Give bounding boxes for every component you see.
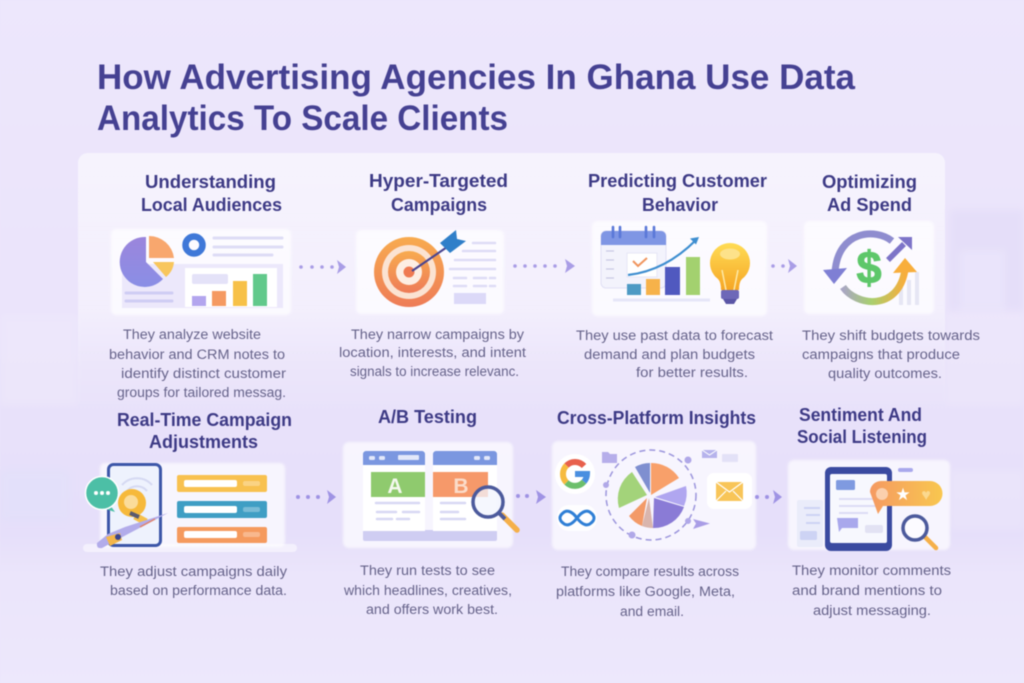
description <box>339 327 526 379</box>
heading: Sentiment And <box>799 405 922 425</box>
description: They monitor comments <box>792 563 951 578</box>
description: They run tests to see <box>360 563 495 578</box>
icon: platform logos and pie <box>552 441 756 550</box>
description <box>576 328 773 380</box>
heading: Hyper-Targeted <box>369 171 508 191</box>
panel: main backdrop <box>78 153 945 418</box>
heading <box>141 172 282 215</box>
heading: Real-Time Campaign <box>117 410 292 430</box>
icon: calendar chart and bulb <box>592 221 767 316</box>
description: They shift budgets towards <box>802 328 980 343</box>
icon: analytics dashboard <box>111 229 291 315</box>
heading: Behavior <box>642 195 718 215</box>
heading: Optimizing <box>822 172 917 192</box>
description: campaigns that produce <box>802 347 960 362</box>
title: Analytics To Scale Clients <box>97 99 508 138</box>
description <box>802 328 980 381</box>
heading: Ad Spend <box>827 195 912 215</box>
description <box>343 563 512 617</box>
description: demand and plan budgets <box>584 347 755 362</box>
description: They adjust campaigns daily <box>100 564 287 579</box>
description: and offers work best. <box>366 602 498 617</box>
panel: cross-platform insights <box>552 408 756 619</box>
panel: sentiment and social listening <box>788 405 951 618</box>
panel: predicting customer behavior <box>576 171 773 380</box>
description <box>100 564 287 598</box>
arrow <box>771 259 797 273</box>
description: groups for tailored messag. <box>117 385 286 400</box>
title <box>97 58 856 138</box>
heading: Local Audiences <box>141 195 282 215</box>
description: which headlines, creatives, <box>343 583 512 598</box>
description: They use past data to forecast <box>576 328 773 343</box>
heading: A/B Testing <box>378 407 477 427</box>
arrow <box>296 490 336 504</box>
icon: dollar with cycle arrows: $ <box>856 242 882 293</box>
heading: Understanding <box>145 172 276 192</box>
heading <box>822 172 917 215</box>
heading: Campaigns <box>391 195 487 215</box>
description: identify distinct customer <box>121 366 287 381</box>
heading: Predicting Customer <box>588 171 767 191</box>
heading <box>369 171 508 215</box>
description: behavior and CRM notes to <box>109 347 285 362</box>
panel: hyper-targeted campaigns <box>339 171 526 379</box>
panel: real-time campaign adjustments <box>83 410 297 598</box>
heading <box>117 410 292 452</box>
description: location, interests, and intent <box>339 345 526 360</box>
description: quality outcomes. <box>828 366 942 381</box>
description <box>792 563 951 618</box>
icon: a/b browser windows: B <box>453 475 469 498</box>
arrow <box>513 259 575 273</box>
description: adjust messaging. <box>813 603 931 618</box>
arrow <box>755 490 782 504</box>
description: They narrow campaigns by <box>351 327 524 342</box>
description: for better results. <box>636 365 748 380</box>
description: platforms like Google, Meta, <box>556 584 735 599</box>
description: based on performance data. <box>110 583 287 598</box>
title: How Advertising Agencies In Ghana Use Data <box>97 58 856 97</box>
description <box>556 564 739 619</box>
arrow <box>516 490 546 504</box>
heading <box>588 171 767 215</box>
panel: a/b testing <box>343 407 517 617</box>
description: and email. <box>620 604 684 619</box>
heading: Cross-Platform Insights <box>557 408 756 428</box>
icon: tablet with reaction bubble: ♥ <box>921 487 931 504</box>
icon: a/b browser windows: A <box>387 475 403 498</box>
description: and brand mentions to <box>792 583 942 598</box>
description: They compare results across <box>561 564 739 579</box>
icon: dollar with cycle arrows <box>804 221 934 314</box>
description: They analyze website <box>123 327 261 342</box>
icon: tablet with reaction bubble <box>788 460 950 551</box>
arrow <box>299 260 346 274</box>
icon: phone with campaign bars <box>83 463 297 552</box>
heading: Adjustments <box>149 432 258 452</box>
description <box>109 327 287 400</box>
panel: understanding local audiences <box>109 172 291 400</box>
icon: target with dart <box>356 230 504 314</box>
description: signals to increase relevanc. <box>350 364 519 379</box>
heading <box>797 405 927 447</box>
icon: a/b browser windows <box>343 442 517 548</box>
panel: optimizing ad spend <box>802 172 980 381</box>
icon: tablet with reaction bubble: ★ <box>895 485 911 504</box>
heading: Social Listening <box>797 427 927 447</box>
